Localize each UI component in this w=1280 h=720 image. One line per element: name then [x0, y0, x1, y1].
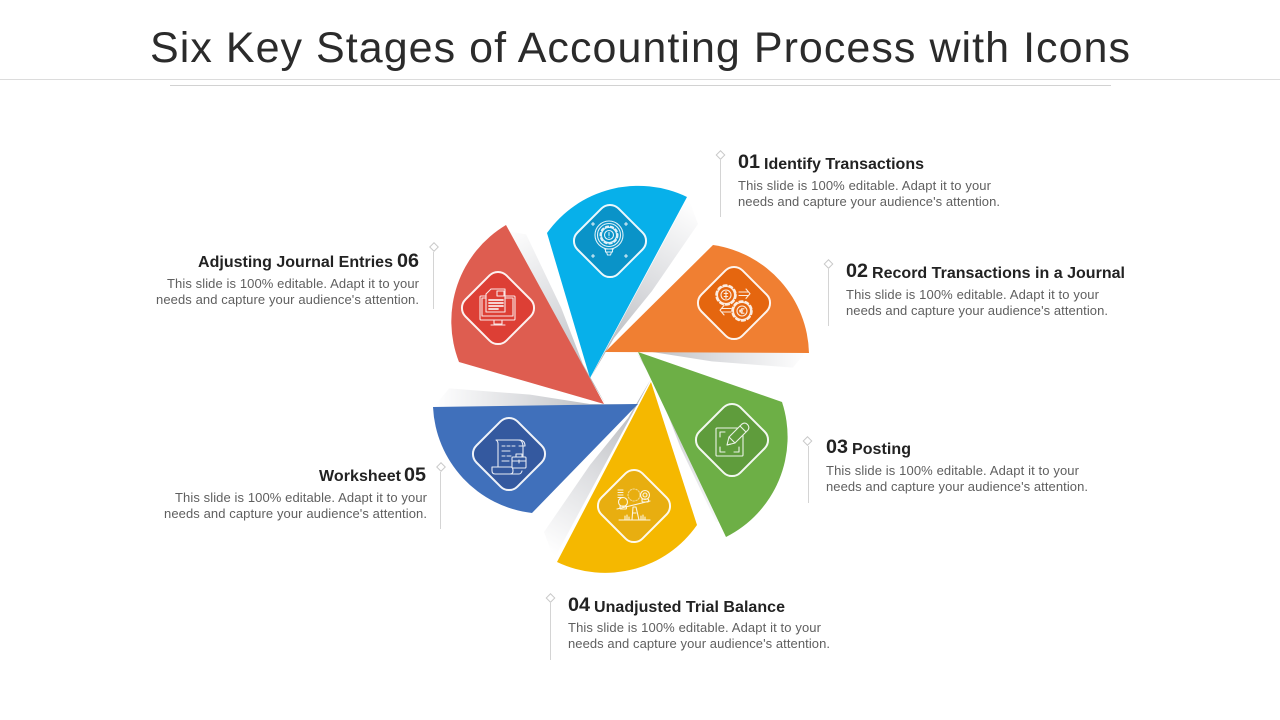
callout 04: Unadjusted Trial Balance: needs and capture your audience's attention. [568, 636, 830, 651]
callout 06: Adjusting Journal Entries: 06 [397, 251, 419, 272]
callout 05: Worksheet: Worksheet [319, 468, 402, 485]
callout 03: Posting: This slide is 100% editable. Adapt it to your [826, 463, 1080, 478]
callout 05: Worksheet: This slide is 100% editable. Adapt it to your [175, 490, 428, 505]
callout 02: Record Transactions in a Journal: 02 [846, 261, 868, 282]
callout 04: Unadjusted Trial Balance: 04 [568, 595, 590, 616]
callout 04: Unadjusted Trial Balance: Unadjusted Trial Balance [594, 599, 785, 616]
segment 01: blue [547, 186, 687, 378]
callout 05: Worksheet: 05 [404, 465, 426, 486]
icon tile 06: computer document [457, 267, 539, 349]
callout 02: Record Transactions in a Journal: This slide is 100% editable. Adapt it to your [846, 287, 1100, 302]
callout 06: Adjusting Journal Entries: Adjusting Journal Entries [198, 254, 393, 271]
callout 01: Identify Transactions: This slide is 100% editable. Adapt it to your [738, 178, 992, 193]
callout 04: Unadjusted Trial Balance [546, 594, 830, 660]
segment 04: yellow [557, 382, 697, 573]
callout 03: Posting: needs and capture your audience's attention. [826, 479, 1088, 494]
callout 06: Adjusting Journal Entries: This slide is 100% editable. Adapt it to your [167, 276, 420, 291]
callout 06: Adjusting Journal Entries: needs and capture your audience's attention. [156, 292, 419, 307]
icon tile 02: currency gears [693, 262, 775, 344]
callout 01: Identify Transactions [716, 151, 1000, 217]
icon tile 04: balance seesaw [593, 465, 675, 547]
icon tile 01: magnifier gear [569, 200, 651, 282]
callout 06: Adjusting Journal Entries [156, 243, 438, 309]
icon tile 03: pencil frame [691, 399, 773, 481]
callout 04: Unadjusted Trial Balance: This slide is 100% editable. Adapt it to your [568, 620, 822, 635]
callout 02: Record Transactions in a Journal: needs and capture your audience's attention. [846, 303, 1108, 318]
callout 03: Posting: Posting [852, 441, 911, 458]
callout 01: Identify Transactions: Identify Transactions [764, 156, 924, 173]
callout 01: Identify Transactions: needs and capture your audience's attention. [738, 194, 1000, 209]
callout 03: Posting [803, 437, 1088, 503]
segment 02: orange [605, 245, 809, 353]
segment 05: dark blue [433, 404, 638, 513]
callout 02: Record Transactions in a Journal: Record Transactions in a Journal [872, 265, 1125, 282]
segment 06: red [451, 225, 604, 404]
callout 05: Worksheet [164, 463, 445, 529]
title: Six Key Stages of Accounting Process with Icons [150, 24, 1130, 72]
segment 03: green [638, 352, 788, 537]
callout 02: Record Transactions in a Journal [824, 260, 1125, 326]
callout 01: Identify Transactions: 01 [738, 152, 760, 173]
callout 05: Worksheet: needs and capture your audience's attention. [164, 506, 427, 521]
pie wheel shadows [426, 197, 816, 559]
callout 03: Posting: 03 [826, 437, 848, 458]
icon tile 05: scroll and briefcase [468, 413, 550, 495]
